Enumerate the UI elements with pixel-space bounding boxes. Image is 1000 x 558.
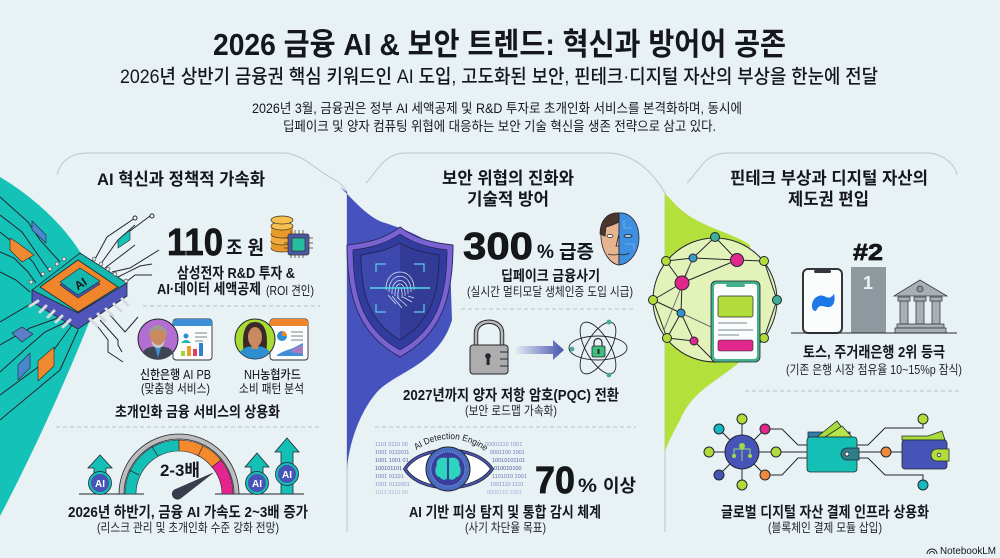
- text: service labels: (맞춤형 서비스): [141, 382, 210, 396]
- header: [120, 27, 878, 134]
- text: payment infrastructure: 글로벌 디지털 자산 결제 인프라 상용화: [721, 504, 929, 521]
- lime background shape: [665, 193, 752, 452]
- heading: 제도권 편입: [788, 190, 869, 209]
- icon: fingerprint shield: [347, 227, 453, 357]
- chart: bank ranking: #2: [853, 239, 883, 265]
- watermark: NotebookLM: NotebookLM: [940, 545, 996, 557]
- icon: deepfake face: [600, 213, 639, 265]
- icon: indigo wallet: [902, 431, 949, 469]
- circuit accent blocks: [10, 221, 130, 381]
- panel: fintech: [648, 153, 962, 535]
- heading: [730, 169, 928, 209]
- icon: AI detection eye: 100101101: [375, 466, 402, 472]
- panel outline: [687, 153, 957, 183]
- arrow: migration to PQC: [516, 340, 564, 360]
- text: service labels: 신한은행 AI PB: [140, 367, 211, 382]
- title: 2026 금융 AI & 보안 트렌드: 혁신과 방어어 공존: [213, 27, 786, 62]
- text: Samsung R&D investment: 삼성전자 R&D 투자 &: [177, 265, 295, 282]
- icon: AI detection eye: 1001 01101: [375, 474, 404, 480]
- indigo background shape: [340, 187, 452, 470]
- icon: AI detection eye: 1001110 1101: [490, 482, 524, 488]
- icon: AI detection eye: 1001 0110011: [375, 450, 409, 456]
- heading: 핀테크 부상과 디지털 자산의: [730, 169, 928, 188]
- icon: padlock: [470, 322, 508, 374]
- text: Samsung R&D investment: (ROI 견인): [266, 284, 314, 298]
- icon: AI arrow middle: AI: [252, 479, 262, 490]
- icon: AI arrow right: [275, 438, 299, 494]
- panel: security: [340, 152, 666, 535]
- icon: coins and chip: [271, 216, 313, 258]
- stat: 110 trillion won: [167, 222, 264, 264]
- icon: AI detection eye: [375, 432, 527, 496]
- text: Toss ranking: [786, 344, 962, 377]
- icon: AI detection eye: 00001110 1001: [485, 442, 522, 448]
- stat: 300 percent: 300: [463, 226, 533, 268]
- icon: AI detection eye: 1101 0110 00: [375, 442, 408, 448]
- icon: AI detection eye: 10010101101: [492, 458, 525, 464]
- icon: phone with Toss logo: [803, 269, 842, 333]
- icon: AI arrow right: AI: [282, 470, 292, 481]
- stat: 110 trillion won: 조 원: [226, 237, 264, 259]
- text: PQC transition: 2027년까지 양자 저항 암호(PQC) 전환: [403, 387, 619, 404]
- panel outline: [57, 153, 347, 532]
- stat: 70 percent: 이상: [603, 476, 636, 496]
- icon: network globe with phone: [648, 232, 782, 362]
- chart: acceleration gauge: 2-3배: [160, 461, 200, 480]
- text: deepfake fraud: [467, 268, 633, 299]
- subtitle: 2026년 상반기 금융권 핵심 키워드인 AI 도입, 고도화된 보안, 핀테크·디지털 자산의 부상을 한눈에 전달: [120, 66, 878, 88]
- icon: AI detection eye: 0001100 1001: [490, 450, 525, 456]
- chart: bank ranking: 1: [863, 273, 873, 293]
- text: payment infrastructure: (블록체인 결제 모듈 삽입): [768, 521, 882, 535]
- heading: AI 혁신과 정책적 가속화: [97, 170, 265, 189]
- text: deepfake fraud: (실시간 멀티모달 생체인증 도입 시급): [467, 285, 633, 299]
- text: Toss ranking: 토스, 주거래은행 2위 등극: [803, 344, 945, 361]
- teal background shape: [0, 177, 90, 516]
- icon: AI detection eye: 1001 1001 01: [375, 458, 409, 464]
- intro text: 2026년 3월, 금융권은 정부 AI 세액공제 및 R&D 투자로 초개인화 서비스를 본격화하며, 동시에: [252, 101, 742, 116]
- stat: 70 percent: %: [578, 476, 597, 497]
- chart: bank ranking: [791, 239, 957, 333]
- text: service labels: [140, 367, 304, 396]
- panel: AI innovation: [0, 153, 347, 535]
- stat: 300 percent: 급증: [559, 242, 594, 263]
- icon: AI detection eye: AI Detection Engine: [415, 432, 487, 450]
- icon: AI detection eye: 010010100: [494, 466, 522, 472]
- subheading: hyper-personalization: 초개인화 금융 서비스의 상용화: [115, 404, 280, 421]
- text: Samsung R&D investment: [157, 265, 314, 298]
- stat: 300 percent: [463, 226, 594, 268]
- heading: 보안 위협의 진화와: [442, 169, 574, 188]
- icon: Shinhan AI PB: [138, 319, 212, 360]
- icon: AI detection eye: 1001 0110001: [375, 482, 410, 488]
- text: PQC transition: (보안 로드맵 가속화): [465, 404, 557, 418]
- icon: AI detection eye: 1101010 1001: [492, 474, 527, 480]
- icon: bank building: [894, 280, 947, 333]
- icon: AI arrow left: [88, 455, 112, 494]
- text: PQC transition: [403, 387, 619, 418]
- icon: quantum atom lock: [569, 317, 627, 379]
- circuit traces: [0, 197, 159, 420]
- text: service labels: 소비 패턴 분석: [239, 382, 304, 396]
- text: phishing detection: AI 기반 피싱 탐지 및 통합 감시 체계: [409, 504, 601, 521]
- stat: 70 percent: 70: [535, 460, 575, 502]
- text: service labels: NH농협카드: [244, 367, 301, 382]
- text: Samsung R&D investment: AI·데이터 세액공제: [157, 281, 261, 298]
- icon: NH card analytics: [235, 319, 308, 360]
- chart: acceleration gauge: [79, 434, 304, 499]
- text: gauge caption: (리스크 관리 및 초개인화 수준 강화 전망): [97, 521, 279, 535]
- text: phishing detection: [409, 504, 601, 535]
- icon: blockchain payment network: [704, 414, 949, 490]
- icon: AI detection eye: 0000110 1001: [487, 490, 522, 496]
- panel outline: [366, 153, 665, 532]
- text: Toss ranking: (기존 은행 시장 점유율 10~15%p 잠식): [786, 362, 962, 377]
- icon: AI chip: AI: [72, 275, 89, 293]
- heading: [442, 169, 574, 209]
- stat: 70 percent: [535, 460, 636, 502]
- icon: teal wallet: [807, 421, 859, 472]
- icon: AI chip: [29, 253, 128, 329]
- text: phishing detection: (사기 차단율 목표): [465, 521, 546, 535]
- stat: 110 trillion won: 110: [167, 222, 223, 264]
- stat: 300 percent: %: [537, 242, 554, 263]
- icon: AI arrow left: AI: [95, 479, 105, 490]
- text: gauge caption: 2026년 하반기, 금융 AI 가속도 2~3배 증가: [68, 504, 308, 521]
- intro text: 딥페이크 및 양자 컴퓨팅 위협에 대응하는 보안 기술 혁신을 생존 전략으로 삼고 있다.: [283, 119, 716, 134]
- text: payment infrastructure: [721, 504, 929, 535]
- intro text: [252, 101, 742, 134]
- text: deepfake fraud: 딥페이크 금융사기: [501, 268, 600, 285]
- icon: AI arrow middle: [245, 453, 269, 494]
- text: gauge caption: [68, 504, 308, 535]
- icon: AI detection eye: 1011 0110 00: [375, 490, 408, 496]
- heading: 기술적 방어: [467, 190, 549, 209]
